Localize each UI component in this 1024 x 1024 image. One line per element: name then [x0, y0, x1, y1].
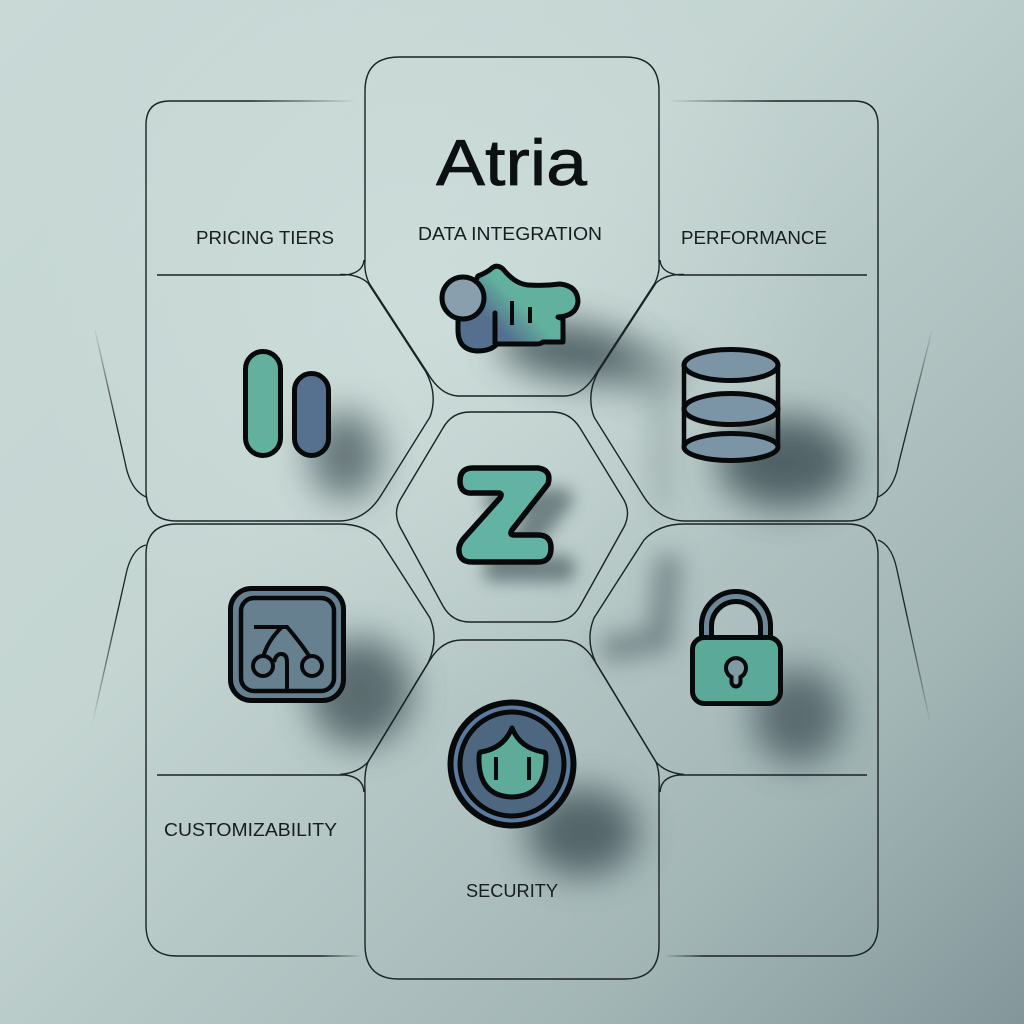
label: pricing tiers: PRICING TIERS	[196, 227, 334, 248]
panel: center hexagon	[396, 412, 628, 622]
icon: git branch tile	[230, 588, 344, 700]
icon: padlock	[692, 596, 780, 704]
panel: customizability	[146, 524, 434, 956]
side decoration strokes	[92, 330, 932, 725]
label: performance: PERFORMANCE	[681, 227, 827, 248]
title: Atria	[436, 127, 587, 199]
icon: database cylinder	[684, 350, 778, 460]
panel: data integration	[365, 57, 659, 396]
icon: shield badge	[450, 702, 574, 826]
icon: data integration blob	[442, 266, 578, 351]
panel: lock	[590, 524, 878, 956]
label: customizability: CUSTOMIZABILITY	[164, 819, 337, 840]
panel: pricing tiers	[146, 101, 433, 521]
panel: security	[365, 640, 659, 979]
icon: center Z	[459, 468, 551, 562]
soft shadows	[308, 314, 853, 876]
panel outlines	[146, 57, 878, 979]
panel: performance	[591, 101, 878, 521]
label: data integration: DATA INTEGRATION	[418, 223, 602, 244]
icon: pricing bars	[246, 352, 328, 456]
label: security: SECURITY	[466, 880, 558, 901]
